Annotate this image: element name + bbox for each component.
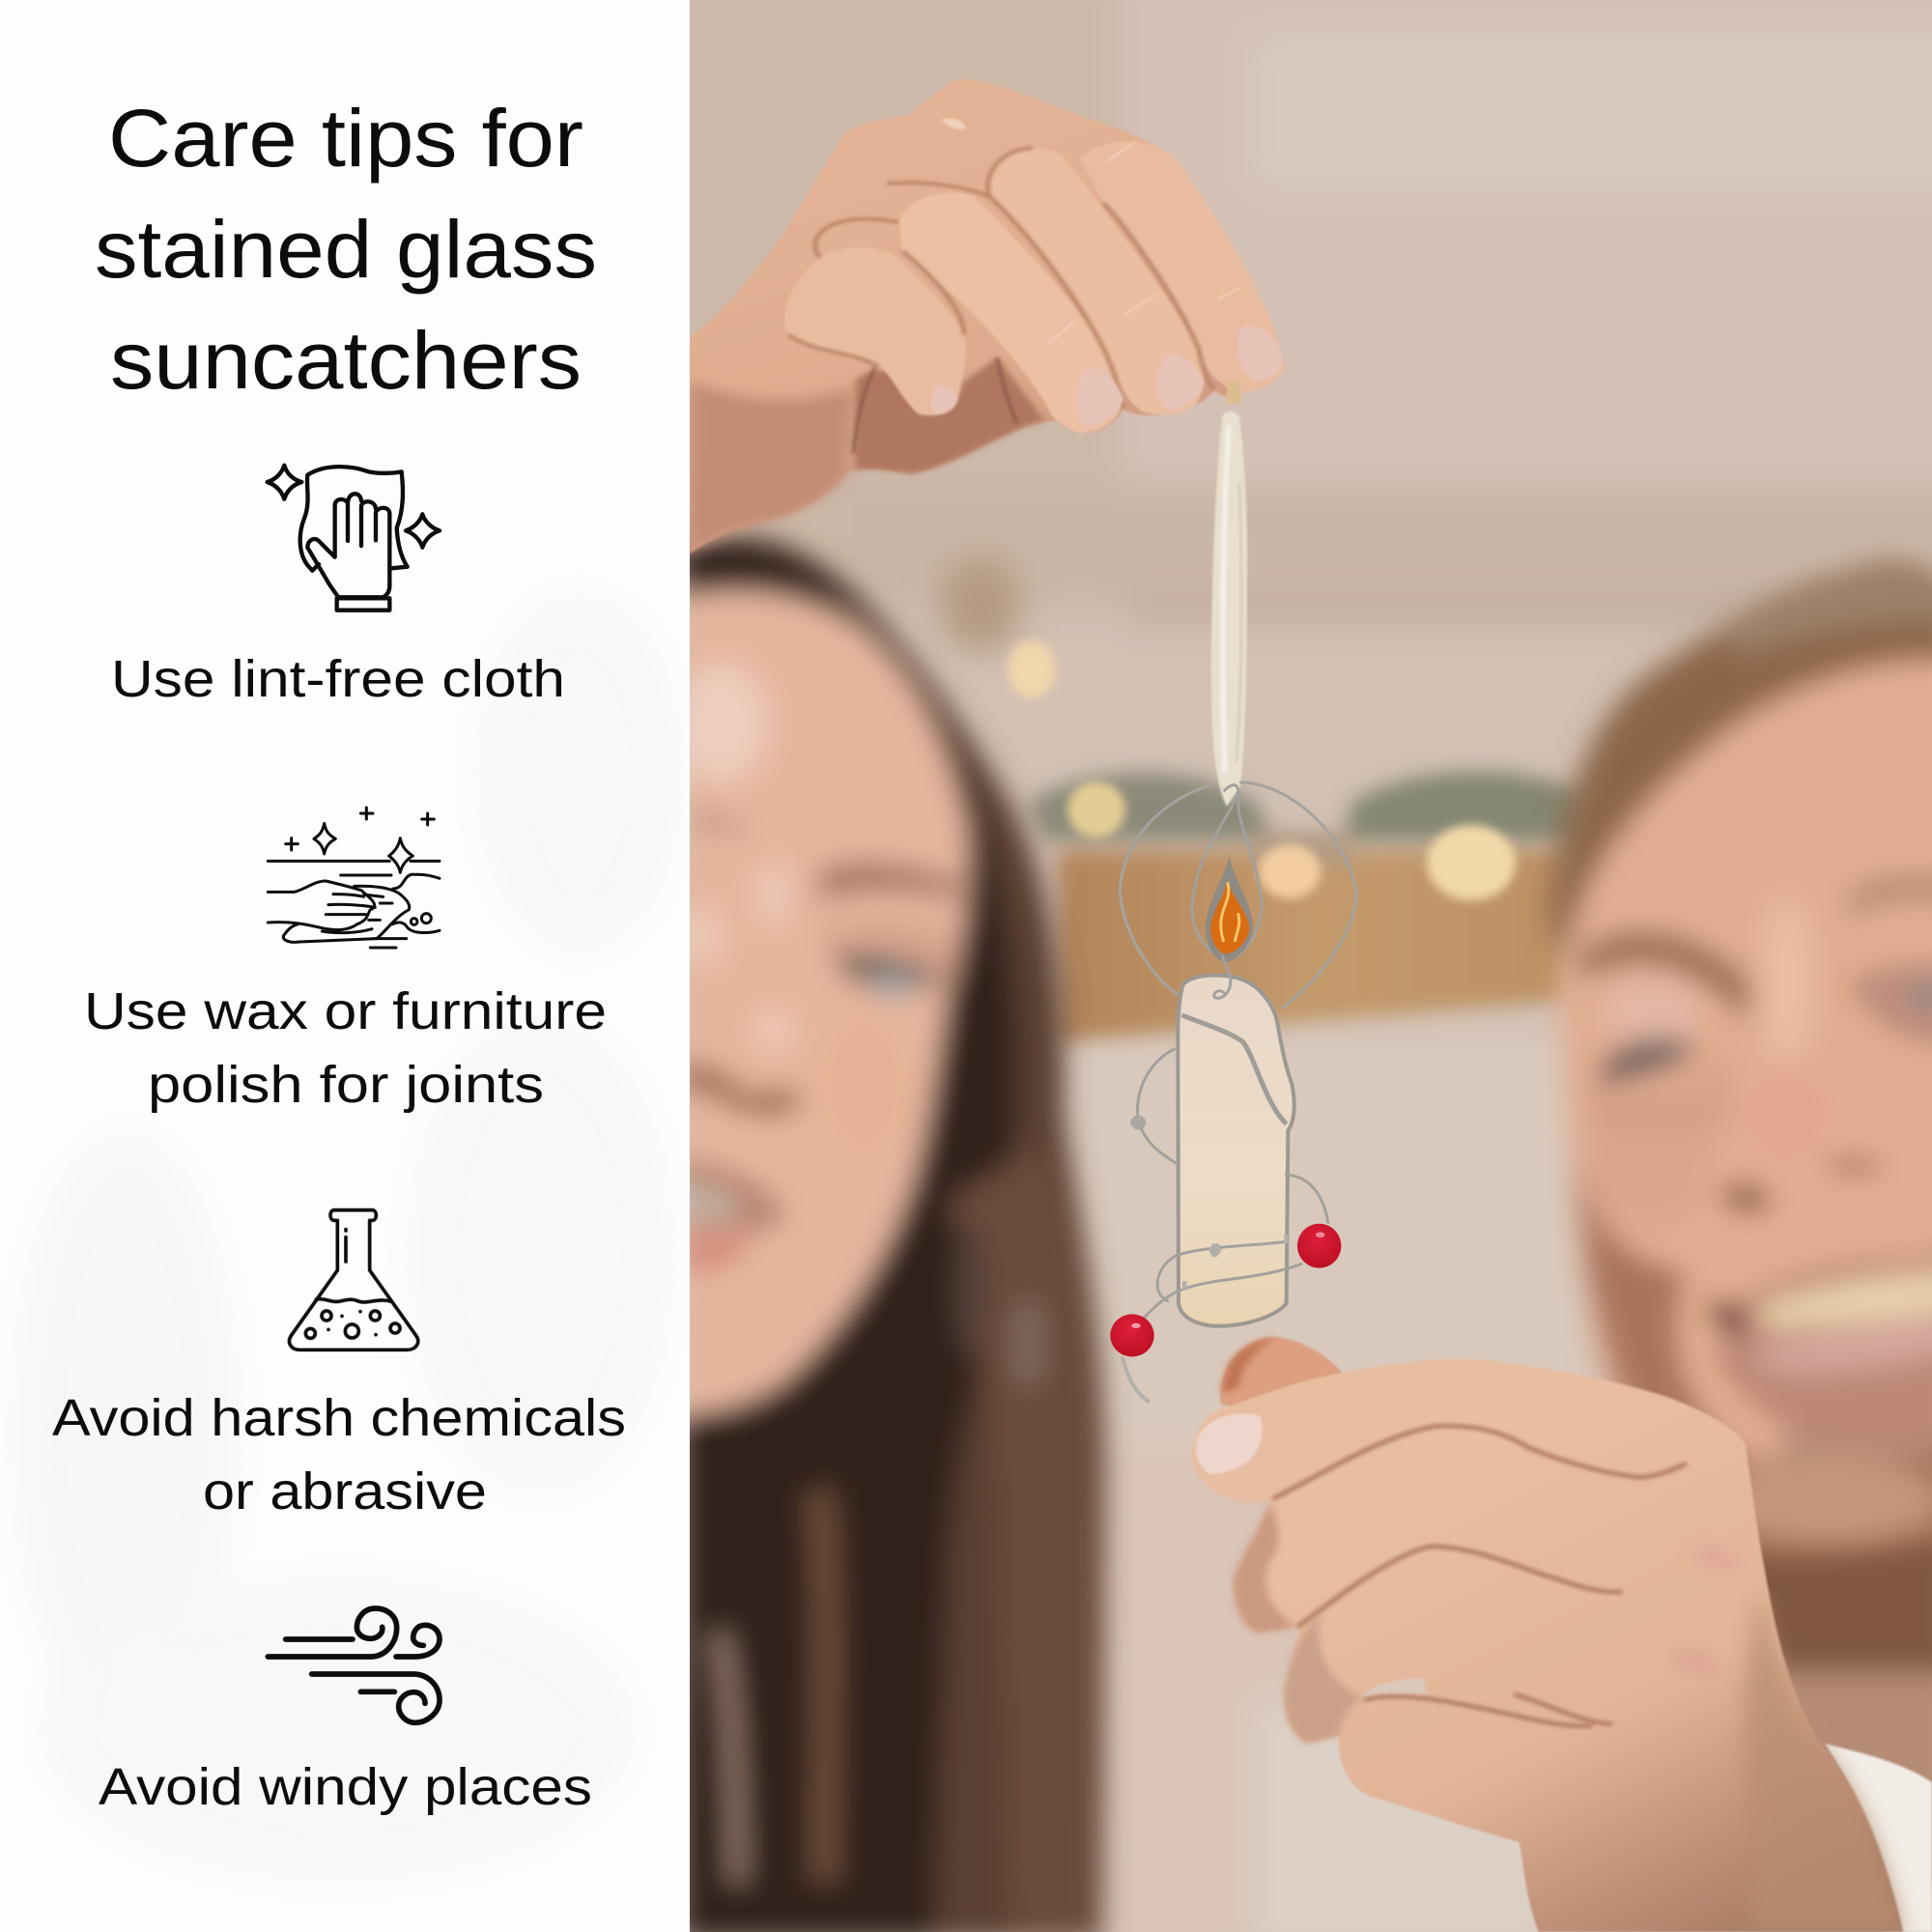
icon: chemical flask (290, 1210, 418, 1350)
middle finger (989, 148, 1204, 414)
little finger (784, 247, 966, 415)
index finger (1080, 141, 1285, 393)
bokeh lights (1008, 640, 1516, 900)
shirt collar (1825, 1744, 1932, 1932)
palm crease (853, 357, 1017, 454)
photo background wall (638, 0, 1932, 1932)
palm-side shade on third finger (1285, 1607, 1361, 1744)
flame (1206, 857, 1253, 962)
label: avoid harsh chemicals (52, 1389, 626, 1520)
top hand pinching ribbon (690, 79, 1285, 554)
red berry right (1297, 1224, 1341, 1268)
thumbnail (1196, 1413, 1263, 1474)
title: Care tips for (108, 93, 583, 184)
label: use lint-free cloth: Use lint-free cloth (111, 650, 565, 708)
solder bead (1130, 1116, 1146, 1129)
wire teardrop around flame (1192, 785, 1262, 957)
candle body (1178, 975, 1294, 1326)
hand silhouette (690, 79, 1285, 554)
knuckle redness lower (1666, 1643, 1727, 1682)
label: avoid harsh chemicals: or abrasive (203, 1463, 487, 1520)
finger shadows (788, 148, 1214, 409)
title (95, 93, 597, 406)
wire halo loop (1120, 782, 1356, 1009)
finger shadows (1272, 1426, 1687, 1726)
icon: hand wiping with cloth (268, 466, 440, 611)
palm shadow (855, 357, 1044, 473)
icon: wind (268, 1608, 440, 1722)
background shelf garland and ornament shape (1029, 772, 1584, 1041)
red berry left (1110, 1314, 1154, 1356)
forearm tone (1745, 1590, 1903, 1932)
photo: couple holding candle suncatcher (638, 0, 1932, 1932)
ribbon and knot (1211, 379, 1247, 807)
title: stained glass (95, 204, 597, 295)
blurred tree shape behind (940, 555, 1021, 652)
stained glass candle ornament (1110, 782, 1356, 1402)
wick curl (1214, 955, 1231, 998)
beads (1182, 1235, 1288, 1291)
wrapped wires (1143, 1241, 1302, 1319)
label: use wax or furniture polish: polish for joints (148, 1056, 544, 1114)
bottom hand (1191, 1337, 1903, 1932)
icon: hand polishing surface (268, 808, 440, 948)
finger crease marks (1048, 142, 1241, 345)
palm-side shade on lower fingers (1234, 1501, 1297, 1634)
wrist tone (690, 380, 855, 554)
man blurred (1548, 560, 1932, 1893)
nub shadow (1221, 1338, 1275, 1393)
label: use wax or furniture polish: Use wax or furniture (84, 982, 607, 1040)
label: use wax or furniture polish (84, 982, 607, 1114)
ring finger (898, 193, 1123, 433)
woman blurred (677, 537, 1105, 1932)
label: avoid windy places: Avoid windy places (99, 1758, 592, 1816)
side wires (1138, 1048, 1328, 1224)
white side panel (0, 0, 690, 1932)
title: suncatchers (110, 315, 582, 406)
hand silhouette (1191, 1359, 1903, 1932)
wire tail (1122, 1356, 1150, 1402)
label: avoid harsh chemicals: Avoid harsh chemicals (52, 1389, 626, 1447)
wax drip line (1181, 1015, 1287, 1123)
gap between fingers showing wall (1361, 1679, 1428, 1698)
fingernails (931, 326, 1283, 427)
knuckle redness (1686, 1537, 1747, 1579)
bent thumb nub (1220, 1337, 1344, 1416)
knuckle highlights (942, 118, 966, 129)
